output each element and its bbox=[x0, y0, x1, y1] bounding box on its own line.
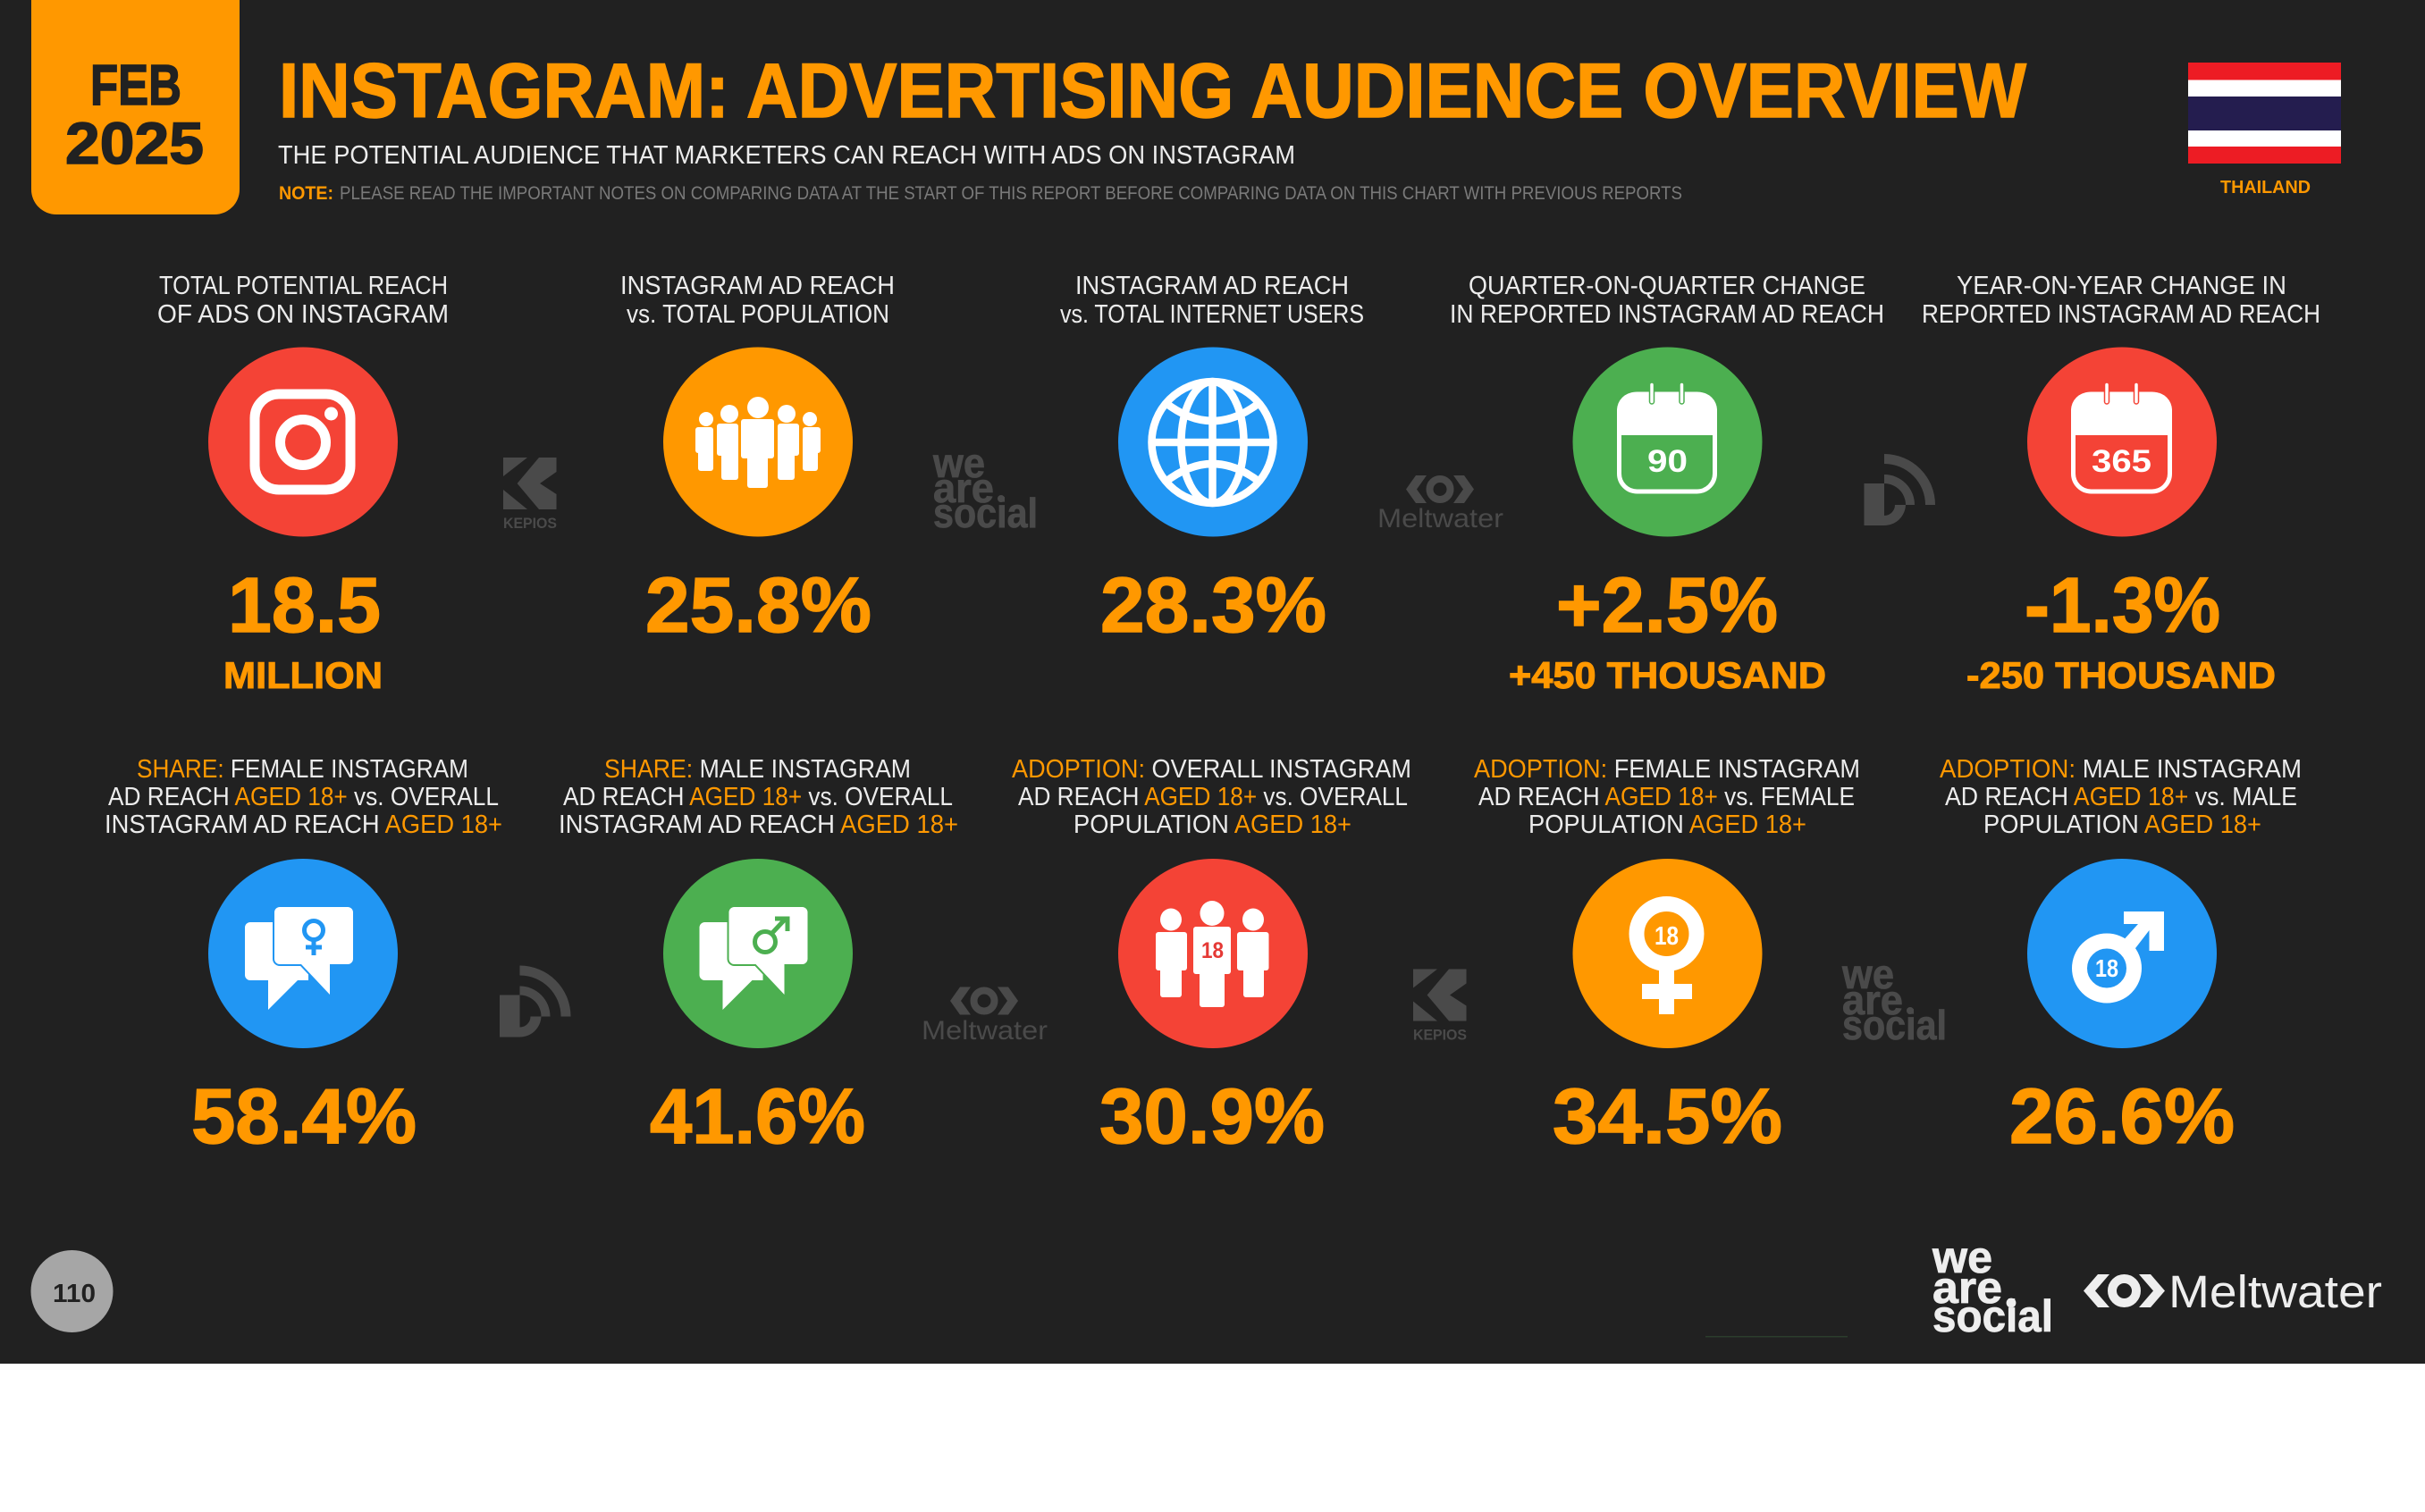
footer logo: We Are Social: we bbox=[1932, 1232, 1992, 1282]
watermark: Meltwater row 2: Meltwater bbox=[922, 1016, 1048, 1046]
heading: TOTAL POTENTIAL REACH bbox=[159, 272, 448, 300]
heading: vs. TOTAL POPULATION bbox=[627, 300, 889, 329]
icon: three people aged 18: 18 bbox=[1201, 938, 1224, 963]
heading: POPULATION AGED 18+ bbox=[1528, 811, 1806, 839]
footer logo: Meltwater bbox=[2084, 1266, 2382, 1317]
value: 41.6% bbox=[650, 1073, 865, 1160]
page number: 110 bbox=[53, 1280, 96, 1308]
country label: THAILAND bbox=[2220, 178, 2311, 197]
watermark: We Are Social row 2: are bbox=[1842, 977, 1903, 1023]
value: 30.9% bbox=[1099, 1073, 1325, 1160]
watermark: Kepios bbox=[503, 458, 557, 532]
heading: POPULATION AGED 18+ bbox=[1983, 811, 2261, 839]
icon: chat bubbles with female symbol bbox=[208, 859, 398, 1048]
heading: AD REACH AGED 18+ vs. MALE bbox=[1945, 783, 2297, 811]
heading: ADOPTION: OVERALL INSTAGRAM bbox=[1012, 755, 1411, 784]
panel: total potential reach bbox=[157, 272, 449, 696]
watermark: Meltwater: Meltwater bbox=[1377, 504, 1503, 533]
icon: globe bbox=[1118, 347, 1308, 536]
icon: male symbol 18: 18 bbox=[2095, 954, 2118, 982]
heading bbox=[105, 755, 502, 839]
heading bbox=[1940, 755, 2302, 839]
footer logo: We Are Social: social bbox=[1932, 1291, 2053, 1341]
watermark: We Are Social row 2 bbox=[1841, 951, 1947, 1048]
watermark: Kepios row 2: KEPIOS bbox=[1413, 1026, 1467, 1044]
heading: vs. TOTAL INTERNET USERS bbox=[1060, 300, 1364, 329]
heading: POPULATION AGED 18+ bbox=[1074, 811, 1351, 839]
absolute change: +450 THOUSAND bbox=[1509, 654, 1826, 696]
heading: SHARE: FEMALE INSTAGRAM bbox=[137, 755, 468, 784]
watermark: We Are Social row 2: social bbox=[1842, 1002, 1947, 1048]
heading bbox=[620, 272, 895, 329]
watermark: We Are Social: are bbox=[933, 465, 994, 511]
value: 18.5 bbox=[228, 562, 381, 649]
date tab: FEB bbox=[90, 53, 181, 117]
footer logo: We Are Social: are bbox=[1932, 1263, 2002, 1313]
heading: AD REACH AGED 18+ vs. FEMALE bbox=[1478, 783, 1855, 811]
absolute change: -250 THOUSAND bbox=[1966, 654, 2276, 696]
heading: OF ADS ON INSTAGRAM bbox=[157, 300, 449, 329]
panel: adoption male bbox=[1940, 755, 2302, 1160]
heading bbox=[1922, 272, 2320, 329]
icon: chat bubbles with male symbol bbox=[663, 859, 853, 1048]
note: NOTE: bbox=[279, 183, 333, 204]
heading: INSTAGRAM AD REACH bbox=[620, 272, 895, 300]
panel: adoption female bbox=[1474, 755, 1860, 1160]
date tab: 2025 bbox=[65, 110, 204, 176]
watermark: We Are Social row 2: we bbox=[1841, 951, 1894, 997]
value: 58.4% bbox=[191, 1073, 417, 1160]
icon: female symbol 18: 18 bbox=[1655, 922, 1679, 951]
heading: IN REPORTED INSTAGRAM AD REACH bbox=[1450, 300, 1884, 329]
subtitle: THE POTENTIAL AUDIENCE THAT MARKETERS CAN REACH WITH ADS ON INSTAGRAM bbox=[278, 141, 1295, 170]
icon: three people aged 18 bbox=[1118, 859, 1308, 1048]
heading: ADOPTION: FEMALE INSTAGRAM bbox=[1474, 755, 1860, 784]
title: INSTAGRAM: ADVERTISING AUDIENCE OVERVIEW bbox=[279, 48, 2027, 134]
watermark: Kepios: KEPIOS bbox=[503, 515, 557, 532]
panel: ad reach vs total population bbox=[620, 272, 895, 649]
panel: share female bbox=[105, 755, 502, 1160]
icon: crowd of people bbox=[663, 347, 853, 536]
icon: calendar 90 bbox=[1573, 347, 1763, 536]
value: +2.5% bbox=[1556, 562, 1778, 649]
date tab bbox=[31, 0, 240, 214]
panel: adoption overall bbox=[1012, 755, 1411, 1160]
icon: Instagram logo bbox=[208, 347, 398, 536]
heading: REPORTED INSTAGRAM AD REACH bbox=[1922, 300, 2320, 329]
heading: SHARE: MALE INSTAGRAM bbox=[604, 755, 911, 784]
heading: INSTAGRAM AD REACH AGED 18+ bbox=[559, 811, 958, 839]
icon: male symbol 18 bbox=[2027, 859, 2217, 1048]
heading: AD REACH AGED 18+ vs. OVERALL bbox=[1018, 783, 1408, 811]
watermark: Meltwater bbox=[1377, 475, 1503, 533]
icon: calendar 365 bbox=[2027, 347, 2217, 536]
value: 34.5% bbox=[1553, 1073, 1782, 1160]
heading: ADOPTION: MALE INSTAGRAM bbox=[1940, 755, 2302, 784]
value: 28.3% bbox=[1100, 562, 1326, 649]
heading bbox=[1012, 755, 1411, 839]
watermark: We Are Social: social bbox=[933, 490, 1038, 536]
footer logo: We Are Social bbox=[1932, 1232, 2053, 1341]
unit: MILLION bbox=[223, 654, 383, 696]
watermark: Kepios row 2 bbox=[1413, 969, 1467, 1044]
heading: AD REACH AGED 18+ vs. OVERALL bbox=[563, 783, 953, 811]
heading: QUARTER-ON-QUARTER CHANGE bbox=[1469, 272, 1865, 300]
heading: INSTAGRAM AD REACH bbox=[1075, 272, 1349, 300]
white bottom strip bbox=[0, 1364, 2425, 1512]
watermark: We Are Social: we bbox=[932, 440, 985, 486]
heading: YEAR-ON-YEAR CHANGE IN bbox=[1957, 272, 2286, 300]
watermark: Meltwater row 2 bbox=[922, 987, 1048, 1046]
watermark: DataReportal bbox=[1865, 454, 1935, 525]
watermark: DataReportal row 2 bbox=[500, 965, 570, 1037]
icon: female symbol 18 bbox=[1573, 859, 1763, 1048]
icon: Thailand flag bbox=[2188, 63, 2341, 164]
heading bbox=[1060, 272, 1364, 329]
heading bbox=[157, 272, 449, 329]
note: PLEASE READ THE IMPORTANT NOTES ON COMPARING DATA AT THE START OF THIS REPORT BEFORE COMPARING DATA ON THIS CHART WITH PREVIOUS REPORTS bbox=[340, 183, 1682, 204]
value: -1.3% bbox=[2025, 562, 2220, 649]
panel: ad reach vs internet users bbox=[1060, 272, 1364, 649]
heading: INSTAGRAM AD REACH AGED 18+ bbox=[105, 811, 502, 839]
value: 26.6% bbox=[2009, 1073, 2235, 1160]
heading bbox=[1474, 755, 1860, 839]
heading bbox=[1450, 272, 1884, 329]
panel: year-on-year change bbox=[1922, 272, 2320, 696]
icon: calendar 365: 365 bbox=[2092, 444, 2151, 479]
heading: AD REACH AGED 18+ vs. OVERALL bbox=[108, 783, 499, 811]
icon: calendar 90: 90 bbox=[1647, 444, 1688, 479]
footer logo: Meltwater: Meltwater bbox=[2168, 1266, 2382, 1317]
panel: quarter-on-quarter change bbox=[1450, 272, 1884, 696]
watermark: We Are Social bbox=[932, 440, 1038, 536]
heading bbox=[559, 755, 958, 839]
panel: share male bbox=[559, 755, 958, 1160]
page number bbox=[30, 1250, 113, 1332]
value: 25.8% bbox=[645, 562, 871, 649]
